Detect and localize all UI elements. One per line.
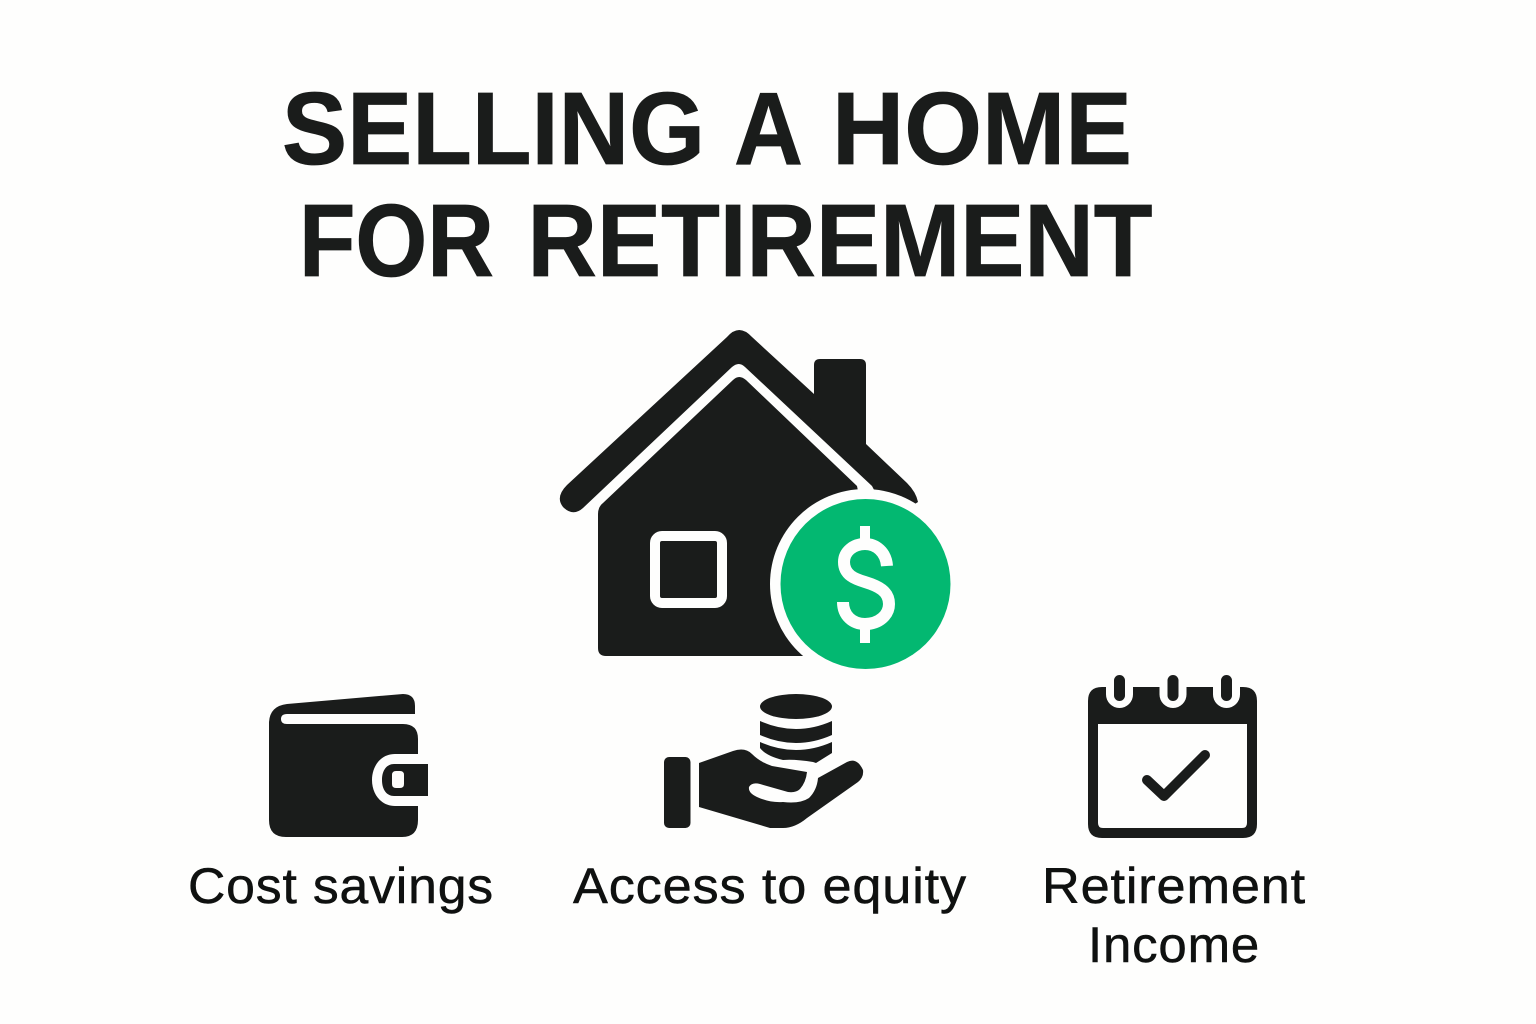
hand xyxy=(699,750,863,828)
label: retirement income: Retirement xyxy=(1042,858,1306,914)
calendar frame xyxy=(1088,687,1257,838)
roof and chimney xyxy=(560,330,918,520)
coin xyxy=(780,499,950,669)
title: SELLING xyxy=(282,71,705,186)
icon: wallet xyxy=(269,694,428,837)
label: access to equity: Access to equity xyxy=(573,858,967,914)
coin stack xyxy=(760,694,832,719)
dollar sign xyxy=(843,526,889,643)
title xyxy=(282,71,1152,298)
title: HOME xyxy=(832,71,1132,186)
title: RETIREMENT xyxy=(528,183,1152,298)
binding rings xyxy=(1114,675,1232,701)
check mark xyxy=(1147,755,1205,796)
label: retirement income: Income xyxy=(1088,917,1260,973)
window xyxy=(655,536,722,603)
wallet clasp xyxy=(382,764,428,796)
label: retirement income xyxy=(1042,858,1306,973)
wallet body xyxy=(269,694,418,837)
coin ring xyxy=(770,489,960,679)
label: cost savings: Cost savings xyxy=(188,858,494,914)
title: A xyxy=(734,71,803,186)
ring cutouts xyxy=(1106,665,1240,708)
cuff xyxy=(664,757,690,828)
title: FOR xyxy=(299,183,494,298)
icon: calendar with check xyxy=(1088,665,1257,838)
house body xyxy=(598,377,880,656)
icon: house with dollar coin xyxy=(560,330,960,679)
icon: hand holding coins xyxy=(664,694,863,828)
